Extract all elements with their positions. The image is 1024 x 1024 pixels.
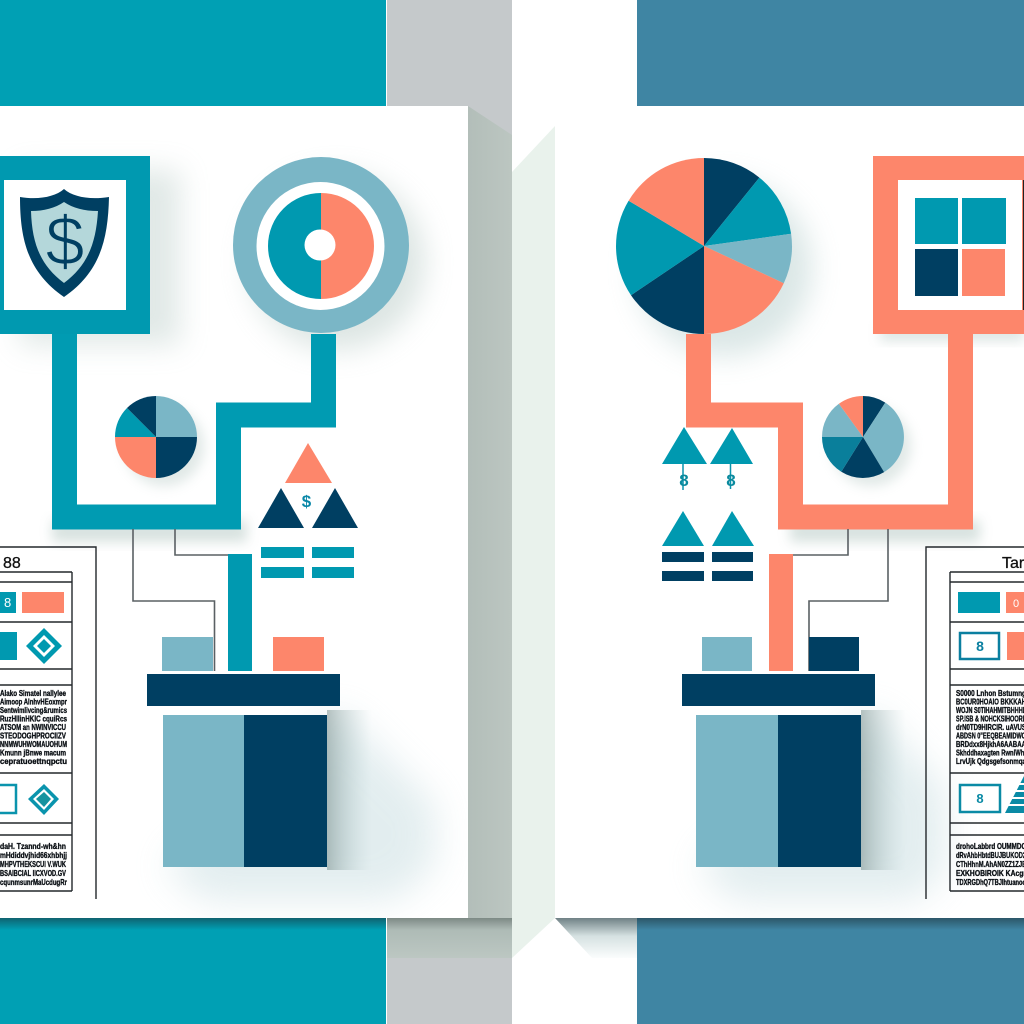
icon: four-square grid <box>873 156 1024 334</box>
text block 1: Sentwimlivcing&rumics <box>0 705 67 715</box>
icon: shield with dollar <box>0 156 150 334</box>
text block 1: cepratuoettnqpctu <box>0 756 67 766</box>
row icons 3: 8 <box>976 791 984 806</box>
soft shadows <box>20 170 435 900</box>
text block 2: daH. Tzannd-wh&hn <box>0 841 66 851</box>
row icons 1 <box>958 592 1024 613</box>
text block 1: Aimoop AlnhvHEoxmpr <box>0 696 67 706</box>
table: right <box>926 547 1024 899</box>
row icons 1 <box>0 592 64 613</box>
text block 2: cqunmsunrMaUcdugRr <box>0 877 67 887</box>
text block 2: BSAIBCIAL IICXVOD.GV <box>0 868 66 878</box>
triangles with navy bars <box>662 511 754 581</box>
triangles with numerals: 8 <box>726 471 736 490</box>
small pie chart <box>822 396 904 478</box>
text block 1 <box>956 688 1024 766</box>
text block 2 <box>956 841 1024 887</box>
row icons 2 <box>0 628 62 664</box>
icon: donut target <box>233 157 409 333</box>
text block 2: MHPVTHEKSCUI V.WUK <box>0 859 67 869</box>
sheet background <box>555 106 1024 918</box>
row icons 1: 8 <box>4 595 11 610</box>
text block 1: NNMWUHWOMAUOHUM <box>0 739 67 749</box>
table frame <box>0 547 96 899</box>
thin connector lines <box>133 529 228 671</box>
column stack <box>682 554 875 867</box>
column stack <box>147 554 340 867</box>
text block 2 <box>0 841 67 887</box>
triangles with numerals: 8 <box>679 471 689 490</box>
row icons 2: 8 <box>976 638 984 654</box>
table heading: Tar <box>1002 555 1024 572</box>
triangle cluster <box>258 443 358 528</box>
table frame <box>926 547 1024 899</box>
row icons 3 <box>960 776 1024 813</box>
table: left <box>0 547 96 899</box>
large pie chart <box>616 158 792 334</box>
table heading: 88 <box>3 555 21 572</box>
panel: left sheet <box>0 106 468 918</box>
pipe connector <box>64 334 324 517</box>
dollar sign: $ <box>46 202 84 280</box>
row icons 3 <box>0 784 59 815</box>
text block 2: mHdiddvjhid66xhbhjj <box>0 850 67 860</box>
small pie chart <box>115 396 197 478</box>
soft shadows <box>636 180 1024 900</box>
thin connector lines <box>793 529 888 671</box>
row icons 1: 0 <box>1013 598 1019 610</box>
text block 1: Alako Simatel nallylee <box>0 688 66 698</box>
text block 1: STEODOGHPROCIIZV <box>0 730 66 740</box>
sheet background <box>0 106 468 918</box>
text block 1: ATSOM an NWINVICCU <box>0 722 66 732</box>
triangles with numerals <box>662 427 753 490</box>
triangle cluster: $ <box>302 492 312 511</box>
frame <box>0 156 150 334</box>
text block 1: Kmunn jBnwe macum <box>0 748 66 758</box>
panel: right sheet <box>616 156 1024 910</box>
teal bars <box>261 547 354 578</box>
text block 1 <box>0 688 67 766</box>
shield <box>20 189 109 297</box>
row icons 2 <box>960 632 1024 660</box>
pipe connector <box>698 334 960 517</box>
text block 1: RuzHIlinHKIC cquiRcs <box>0 714 67 724</box>
